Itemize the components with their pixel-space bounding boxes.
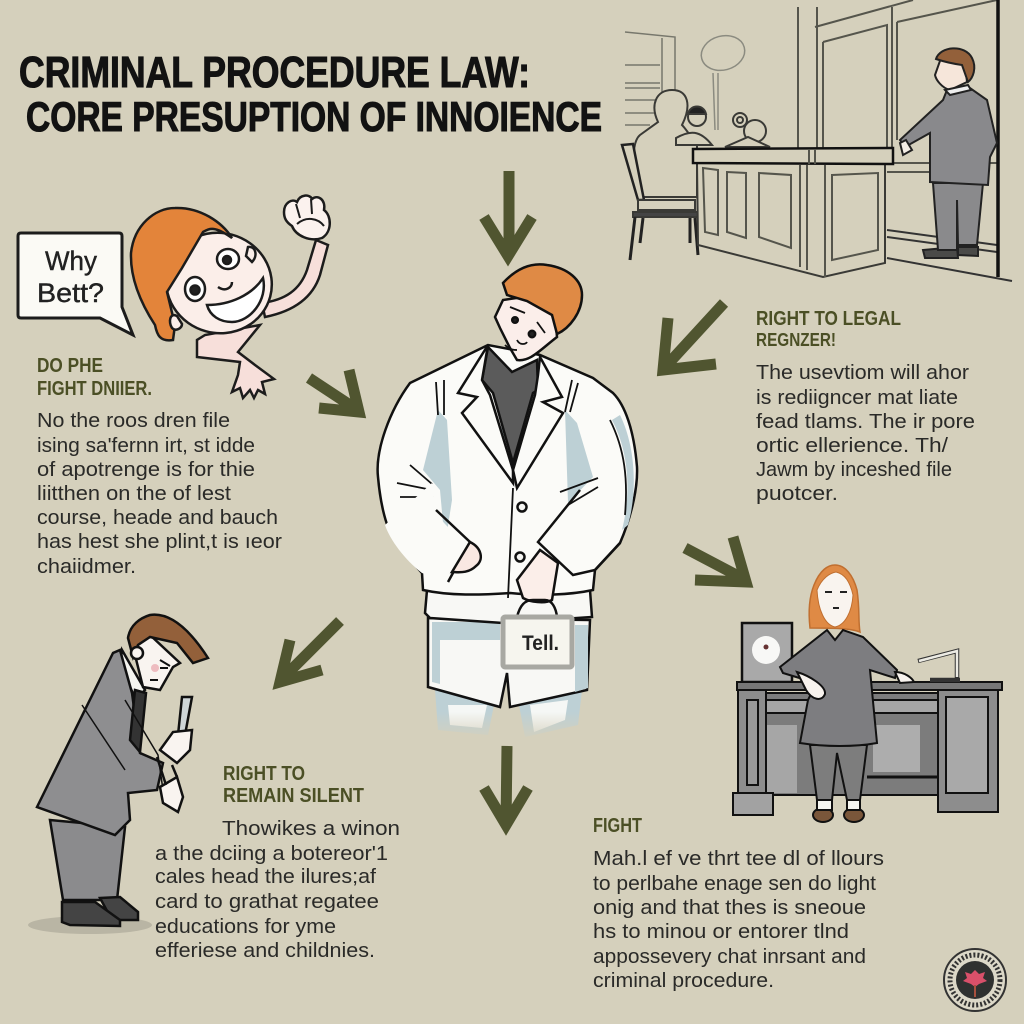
courtroom standing man: [900, 48, 997, 258]
left text block: liitthen on the of lest: [37, 482, 231, 505]
cartoon face with raised fist: [131, 196, 330, 398]
hair: [128, 615, 208, 663]
title: CRIMINAL PROCEDURE LAW:: [19, 48, 530, 97]
fight text block: hs to minou or entorer tlnd: [593, 920, 849, 943]
ear: [131, 647, 143, 659]
trouser shading: [432, 622, 588, 692]
woman at desk illustration: [733, 565, 1002, 822]
hair: [809, 565, 860, 632]
bag labelled Tell: Tell.: [522, 632, 559, 655]
left sleeve cuff: [385, 483, 470, 582]
seal logo: [944, 949, 1006, 1011]
legal text block: RIGHT TO LEGAL: [756, 308, 901, 330]
shirt: [120, 650, 145, 700]
title: CORE PRESUPTION OF INNOIENCE: [26, 93, 602, 140]
right to remain silent text block: cales head the ilures;af: [155, 865, 376, 888]
jacket shading: [423, 410, 634, 545]
right sleeve: [538, 490, 620, 575]
lower hand: [160, 777, 183, 812]
left text block: [37, 355, 282, 578]
face details: [512, 317, 518, 323]
trousers: [50, 820, 125, 900]
title: [19, 48, 602, 140]
fight text block: appossevery chat inrsant and: [593, 945, 866, 968]
hands: [797, 672, 825, 699]
left text block: FIGHT DNIIER.: [37, 378, 152, 400]
central figure in white coat: [378, 264, 637, 737]
hair: [503, 264, 582, 334]
jacket sleeve: [82, 700, 163, 790]
lamp highlight: [919, 651, 957, 677]
right to remain silent text block: RIGHT TO: [223, 763, 305, 785]
right to remain silent text block: educations for yme: [155, 915, 336, 938]
left text block: No the roos dren file: [37, 409, 230, 432]
left text block: of apotrenge is for thie: [37, 458, 255, 481]
left hand: [452, 542, 481, 572]
shoes: [100, 897, 138, 920]
arrow top: [484, 171, 532, 256]
jacket: [37, 650, 163, 835]
arrow bottom: [484, 746, 528, 825]
right to remain silent text block: card to grathat regatee: [155, 890, 379, 913]
left text block: chaiidmer.: [37, 555, 136, 578]
legal text block: puotcer.: [756, 482, 838, 505]
speech bubble: Bett?: [37, 278, 104, 308]
left text block: ising sa'fernn irt, st idde: [37, 434, 255, 457]
upper hand: [160, 730, 192, 763]
leg highlights: [448, 700, 568, 732]
left text block: course, heade and bauch: [37, 506, 278, 529]
lamp: [918, 651, 960, 680]
jacket: [378, 345, 637, 595]
left lapel: [458, 345, 513, 483]
legal text block: Jawm by inceshed file: [756, 458, 952, 481]
bag labelled Tell: [503, 600, 572, 667]
right to remain silent text block: REMAIN SILENT: [223, 785, 364, 807]
torso: [780, 630, 897, 746]
right hand: [517, 550, 558, 602]
arrow lower left: [280, 621, 340, 682]
fight text block: FIGHT: [593, 815, 642, 837]
legal text block: REGNZER!: [756, 330, 836, 350]
monitor: [742, 623, 792, 682]
arrow left: [309, 370, 359, 412]
legal text block: ortic ellerience. Th/: [756, 434, 948, 457]
tie: [130, 690, 146, 752]
speech bubble: Why: [45, 246, 97, 276]
arrow to legal: [663, 303, 724, 370]
right to remain silent text block: [155, 763, 400, 962]
left text block: DO PHE: [37, 355, 103, 377]
right lapel: [513, 357, 563, 488]
desk: [765, 693, 938, 795]
arrow right: [685, 537, 746, 582]
legal text block: The usevtiom will ahor: [756, 361, 969, 384]
neck and face: [495, 296, 557, 360]
shoes: [813, 808, 833, 822]
legal text block: [756, 308, 975, 505]
leg fade: [425, 712, 595, 742]
face: [132, 635, 180, 690]
fight text block: criminal procedure.: [593, 969, 774, 992]
handcuffed man illustration: [28, 615, 208, 934]
fight text block: to perlbahe enage sen do light: [593, 872, 876, 895]
buttons: [518, 502, 526, 512]
trousers: [810, 745, 867, 800]
right to remain silent text block: Thowikes a winon: [222, 817, 400, 840]
face details: [825, 592, 847, 608]
face: [817, 572, 853, 627]
jacket seams: [397, 380, 626, 598]
right to remain silent text block: efferiese and childnies.: [155, 939, 375, 962]
vial: [178, 697, 192, 735]
right to remain silent text block: a the dciing a botereor'1: [155, 842, 388, 865]
speech bubble: [18, 233, 133, 335]
left text block: has hest she plint,t is ıeor: [37, 530, 282, 553]
legs: [435, 690, 582, 737]
fight text block: onig and that thes is sneoue: [593, 896, 866, 919]
legal text block: fead tlams. The ir pore: [756, 410, 975, 433]
coat lower section: [425, 590, 592, 623]
fight text block: [593, 815, 884, 992]
shirt: [482, 347, 538, 463]
trousers: [428, 618, 590, 707]
legal text block: is rediigncer mat liate: [756, 386, 958, 409]
courtroom illustration: [622, 0, 1012, 281]
cuffs: [157, 757, 177, 785]
fight text block: Mah.l ef ve thrt tee dl of llours: [593, 847, 884, 870]
